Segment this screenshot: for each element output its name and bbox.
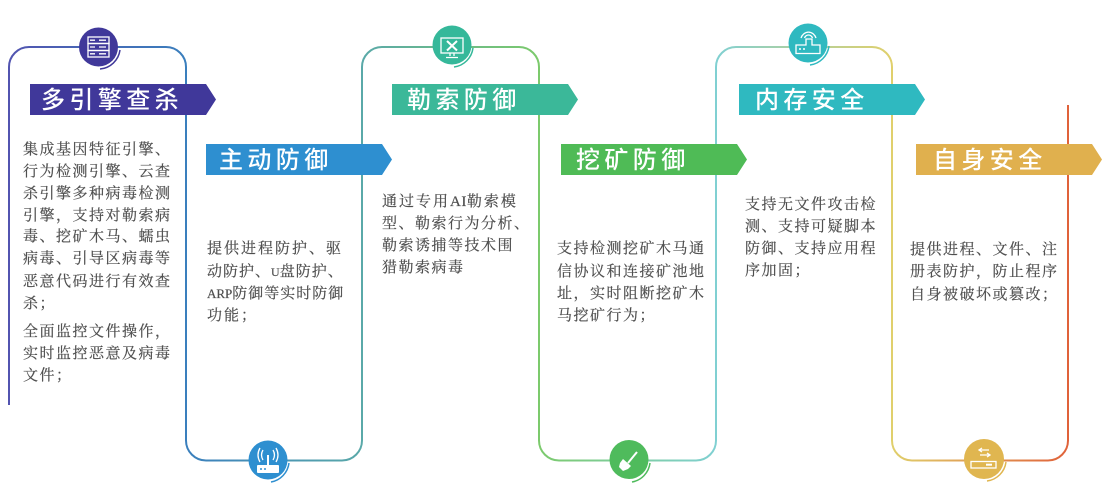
icon: shovel [610, 440, 650, 482]
body text: 内存安全: 支持无文件攻击检 [745, 195, 877, 213]
body text: 挖矿防御: 址，实时阻断挖矿木 [557, 285, 706, 302]
banner: 主动防御: 主动防御 [219, 147, 333, 174]
banner: 多引擎查杀 [30, 84, 216, 115]
banner: 勒索防御 [392, 84, 578, 115]
body text: 多引擎查杀: 实时监控恶意及病毒 [23, 345, 172, 362]
body text: 多引擎查杀: 恶意代码进行有效查 [23, 273, 172, 290]
body text: 多引擎查杀: 行为检测引擎、云查 [23, 162, 172, 180]
body text: 多引擎查杀: 全面监控文件操作， [23, 323, 172, 340]
body text: 勒索防御: 型、勒索行为分析、 [382, 214, 531, 232]
banner: 主动防御 [206, 144, 392, 175]
icon: monitor with tools [432, 26, 473, 67]
banner: 自身安全 [916, 144, 1102, 175]
panel: 主动防御 [206, 144, 392, 482]
body text: 主动防御: 提供进程防护、驱 [207, 239, 343, 257]
icon: network switch [964, 439, 1006, 481]
body text: 自身安全: 自身被破坏或篡改； [910, 286, 1059, 303]
panel: 多引擎查杀 [23, 28, 216, 384]
body text: 挖矿防御: 支持检测挖矿木马通 [557, 239, 706, 257]
banner: 内存安全: 内存安全 [755, 87, 869, 114]
body text: 主动防御: 功能； [207, 307, 258, 324]
icon: wifi modem [788, 24, 829, 65]
banner: 内存安全 [739, 84, 925, 115]
body text: 自身安全: 提供进程、文件、注 [910, 240, 1059, 258]
body text: 多引擎查杀: 毒、挖矿木马、蠕虫 [23, 228, 172, 245]
panel: 勒索防御 [382, 26, 578, 276]
body text: 多引擎查杀: 病毒、引导区病毒等 [23, 249, 172, 267]
banner: 勒索防御: 勒索防御 [407, 87, 521, 114]
panel: 内存安全 [739, 24, 925, 279]
body text: 挖矿防御: 信协议和连接矿池地 [557, 262, 706, 280]
body text: 主动防御: 动防护、U盘防护、 [207, 264, 344, 280]
panel: 自身安全 [910, 144, 1102, 481]
icon: server rack [79, 28, 120, 69]
icon: wireless router [248, 440, 289, 482]
panel: 挖矿防御 [557, 144, 747, 482]
body text: 勒索防御: 通过专用AI勒索模 [382, 194, 518, 210]
body text: 内存安全: 测、支持可疑脚本 [745, 217, 877, 235]
body text: 内存安全: 序加固； [745, 262, 811, 279]
banner: 挖矿防御 [561, 144, 747, 175]
body text: 多引擎查杀: 杀引擎多种病毒检测 [23, 184, 172, 202]
body text: 勒索防御: 勒索诱捕等技术围 [382, 236, 514, 254]
body text: 多引擎查杀: 杀； [23, 295, 56, 312]
body text: 多引擎查杀: 引擎，支持对勒索病 [23, 206, 172, 224]
body text: 主动防御: ARP防御等实时防御 [207, 286, 344, 302]
body text: 内存安全: 防御、支持应用程 [745, 240, 877, 257]
banner: 自身安全: 自身安全 [933, 147, 1047, 174]
body text: 挖矿防御: 马挖矿行为； [557, 307, 656, 324]
body text: 多引擎查杀: 集成基因特征引擎、 [23, 140, 172, 158]
body text: 自身安全: 册表防护，防止程序 [910, 262, 1059, 280]
body text: 多引擎查杀: 文件； [23, 367, 73, 384]
banner: 挖矿防御: 挖矿防御 [576, 147, 690, 174]
banner: 多引擎查杀: 多引擎查杀 [41, 87, 183, 114]
body text: 勒索防御: 猎勒索病毒 [382, 258, 465, 276]
